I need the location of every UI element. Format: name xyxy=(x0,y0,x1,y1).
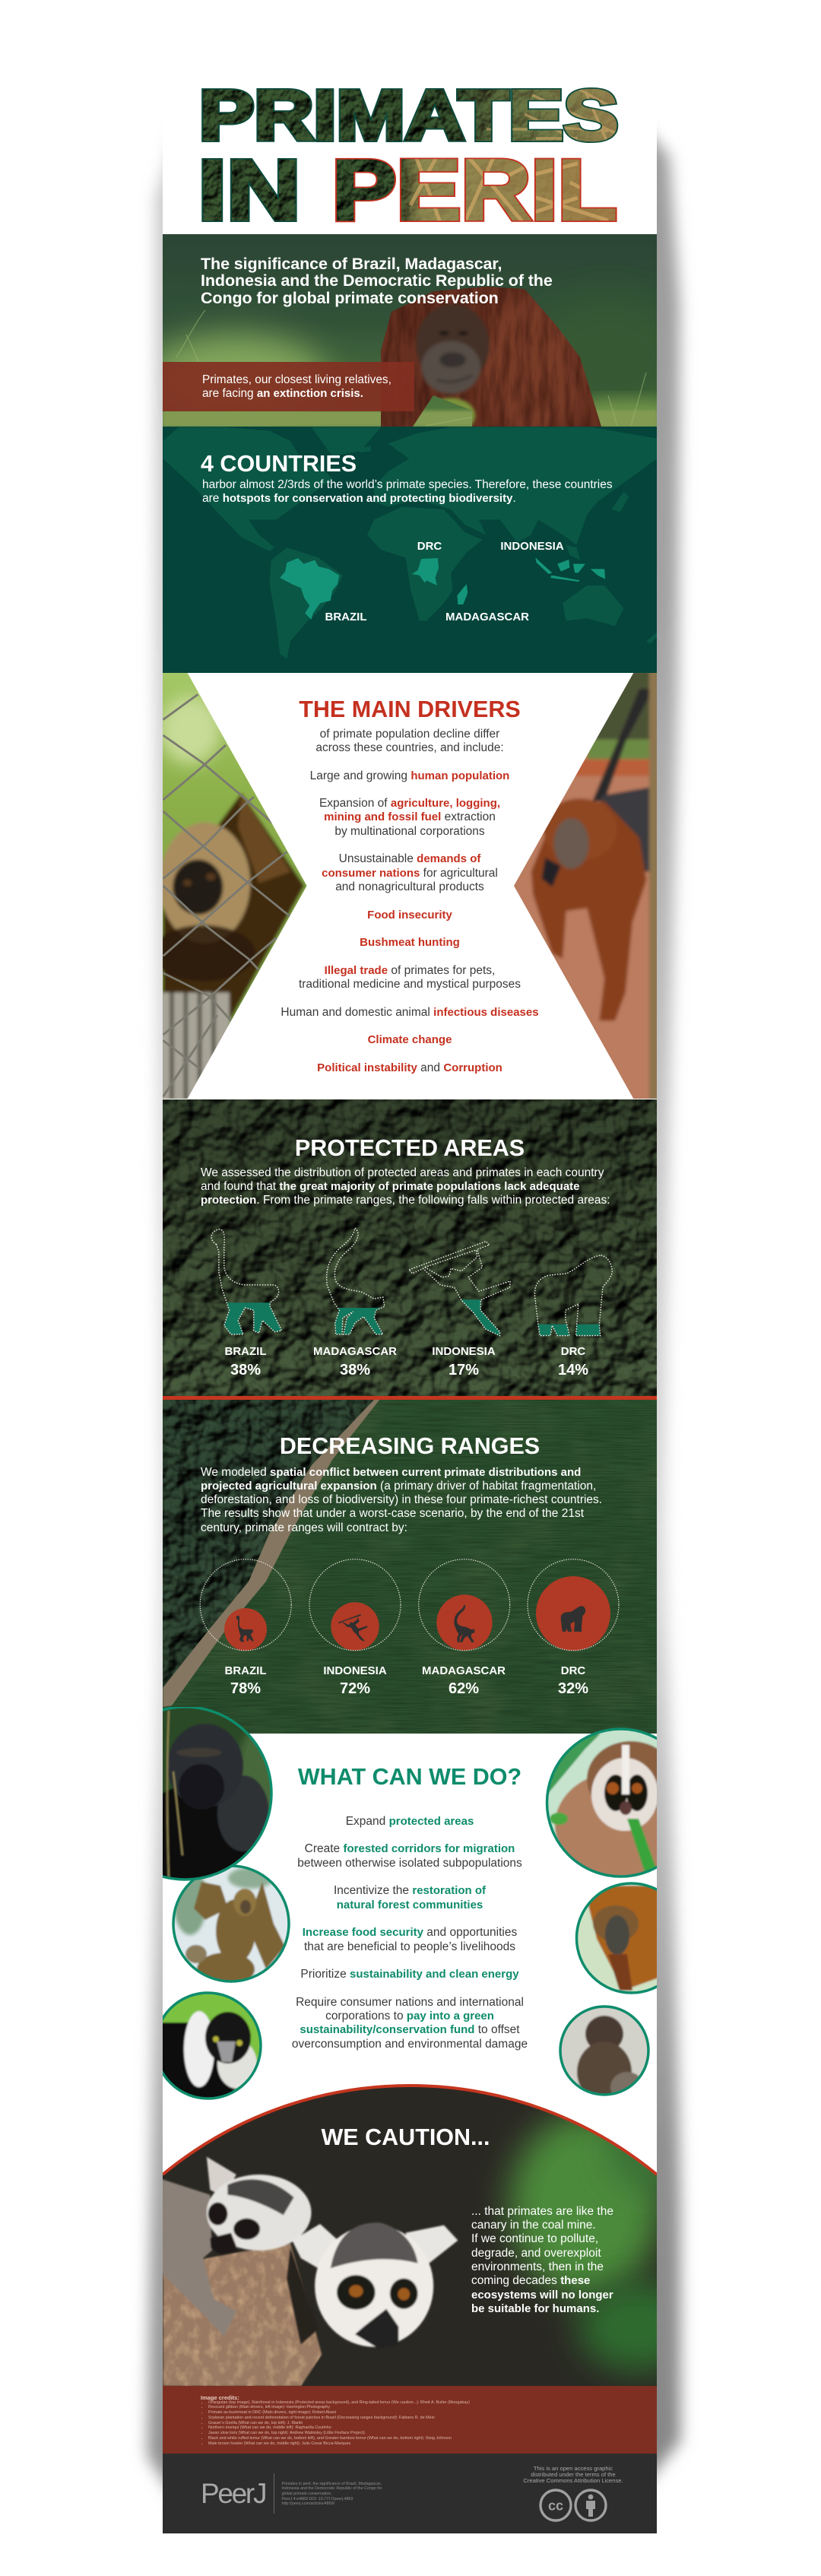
heading: significance: Indonesia and the Democratic Republic of the xyxy=(201,271,553,290)
credits list: Orangutan (top image), Rainforest in Indonesia (Protected areas background), and Ring-tailed lemur (We caution...): Rhett A. Butler (Mongabay) xyxy=(208,2400,470,2405)
stat: Madagascar: MADAGASCAR xyxy=(313,1345,397,1358)
credits list xyxy=(201,2400,470,2446)
heading: 4 countries: 4 COUNTRIES xyxy=(201,451,357,477)
action list: Require consumer nations and international xyxy=(296,1996,524,2009)
stat: Indonesia xyxy=(323,1664,387,1697)
citation: PeerJ 4:e4869 DOI: 10.7717/peerj.4869 xyxy=(281,2497,353,2501)
stat: DRC: 32% xyxy=(558,1680,588,1697)
credits list: Rescued gibbon (Main drivers, left image): Harrington Photography xyxy=(208,2405,330,2409)
intro text: are hotspots for conservation and protecting biodiversity. xyxy=(202,492,516,505)
label: DRC: DRC xyxy=(417,540,442,553)
heading: we caution: WE CAUTION... xyxy=(322,2124,490,2150)
decreasing ranges text: deforestation, and loss of biodiversity) in these four primate-richest countries. xyxy=(201,1493,602,1506)
driver list: Human and domestic animal infectious diseases xyxy=(281,1006,539,1019)
credits list: Northern muriqui (What can we do, middle left): Raphaella Coutinho xyxy=(208,2425,331,2430)
photo: orangutan in grass xyxy=(163,287,657,427)
driver list: mining and fossil fuel extraction xyxy=(324,811,496,823)
caution text: environments, then in the xyxy=(471,2260,604,2273)
heading: significance: The significance of Brazil, Madagascar, xyxy=(201,255,502,273)
credits list: Soybean plantation and recent deforestation of forest patches in Brazil (Decreasing ranges background): Fabiano R. de Melo xyxy=(208,2416,435,2420)
action list: between otherwise isolated subpopulations xyxy=(297,1857,522,1870)
icon: creative commons badges xyxy=(539,2489,607,2522)
caution text: If we continue to pollute, xyxy=(471,2232,598,2245)
panel: 4 countries xyxy=(163,427,657,673)
stat: Brazil: BRAZIL xyxy=(225,1664,266,1677)
credits list: Primate as bushmeat in DRC (Main drivers, right image): Robert Abani xyxy=(208,2410,336,2415)
stat: Brazil: 78% xyxy=(230,1680,261,1697)
driver list: Expansion of agriculture, logging, xyxy=(319,797,500,810)
stat: Madagascar: MADAGASCAR xyxy=(422,1664,506,1677)
stat: Indonesia: 17% xyxy=(449,1362,479,1378)
driver list: Food insecurity xyxy=(367,909,452,922)
credits list: Black and white ruffed lemur (What can we do, bottom left), and Greater bamboo lemur (What can we do, bottom right): Steig Johnson xyxy=(208,2436,452,2441)
credits heading: Image credits: xyxy=(201,2394,239,2401)
callout text xyxy=(202,373,391,400)
panel: footer xyxy=(163,2454,657,2533)
caution text: degrade, and overexploit xyxy=(471,2247,601,2260)
credits list: Grauer’s Gorilla (What can we do, top left): J. Martin xyxy=(208,2421,303,2425)
photo: ring-tailed lemurs xyxy=(160,2083,699,2386)
logo: PeerJ: PeerJ xyxy=(201,2478,265,2509)
heading: what can we do: WHAT CAN WE DO? xyxy=(298,1764,521,1790)
caution text xyxy=(471,2205,613,2315)
callout text: are facing an extinction crisis. xyxy=(202,387,363,400)
caution text: coming decades these xyxy=(471,2274,590,2287)
license text: distributed under the terms of the xyxy=(531,2471,616,2478)
driver list: Climate change xyxy=(368,1033,452,1046)
protected areas text: protection. From the primate ranges, the following falls within protected areas: xyxy=(201,1194,610,1207)
license text xyxy=(523,2465,623,2484)
stat: DRC: 14% xyxy=(558,1362,588,1378)
panel: we caution xyxy=(163,2084,657,2386)
photo: howler monkey xyxy=(575,1882,657,1994)
chart: range contraction circles xyxy=(200,1559,619,1651)
citation: global primate conservation. xyxy=(281,2492,332,2496)
decreasing ranges text: We modeled spatial conflict between current primate distributions and xyxy=(201,1466,581,1478)
icon: gorilla xyxy=(561,1606,585,1632)
action list: natural forest communities xyxy=(337,1899,483,1911)
stat: Madagascar: 62% xyxy=(449,1680,479,1697)
callout text: Primates, our closest living relatives, xyxy=(202,373,391,386)
action list: Create forested corridors for migration xyxy=(305,1842,515,1855)
decreasing ranges text xyxy=(201,1466,602,1534)
stat: Madagascar: 38% xyxy=(340,1362,370,1378)
background: rainforest canopy xyxy=(163,1099,657,1396)
title: PRIMATES xyxy=(201,87,619,143)
icon: gibbon xyxy=(338,1614,367,1642)
panel: title xyxy=(163,87,657,234)
citation: Indonesia and the Democratic Republic of the Congo for xyxy=(281,2486,382,2491)
panel: what can we do xyxy=(163,1707,657,2173)
caution text: ecosystems will no longer xyxy=(471,2289,613,2302)
heading: significance: Congo for global primate conservation xyxy=(201,289,499,307)
action list xyxy=(292,1815,528,2051)
credits list: Male brown howler (What can we do, middle right): Julio Cesar Bicca-Marques xyxy=(208,2441,350,2446)
label: Madagascar: MADAGASCAR xyxy=(445,611,529,623)
license text: This is an open access graphic xyxy=(534,2465,613,2472)
stat: Brazil xyxy=(225,1345,266,1378)
panel: decreasing ranges xyxy=(163,1400,657,1734)
heading: significance xyxy=(201,255,553,307)
stat: Indonesia xyxy=(432,1345,496,1378)
icon: lemur xyxy=(454,1604,475,1642)
citation: http://peerj.com/articles/4869/ xyxy=(281,2501,334,2506)
protected areas text: We assessed the distribution of protected areas and primates in each country xyxy=(201,1166,604,1179)
panel: main drivers xyxy=(163,673,657,1099)
action list: Incentivize the restoration of xyxy=(334,1884,486,1897)
driver list: of primate population decline differ xyxy=(320,728,499,741)
stat: Madagascar xyxy=(422,1664,506,1697)
action list: Expand protected areas xyxy=(346,1815,474,1828)
stat: Brazil: BRAZIL xyxy=(225,1345,266,1358)
action list: corporations to pay into a green xyxy=(325,2010,494,2022)
stat: DRC: DRC xyxy=(561,1664,585,1677)
red callout box xyxy=(163,362,414,411)
action list: Prioritize sustainability and clean energy xyxy=(300,1968,519,1981)
country: Indonesia xyxy=(535,557,605,582)
driver list: across these countries, and include: xyxy=(315,741,504,754)
driver list: and nonagricultural products xyxy=(335,880,484,893)
citation: Primates in peril: the significance of Brazil, Madagascar, xyxy=(281,2482,382,2486)
icon: monkey xyxy=(236,1616,254,1642)
stat: Brazil: 38% xyxy=(230,1362,261,1378)
photo: slow loris xyxy=(546,1727,657,1878)
panel: protected areas xyxy=(163,1099,657,1400)
panel: hero orangutan intro xyxy=(163,234,657,427)
driver list: Unsustainable demands of xyxy=(339,852,480,865)
citation xyxy=(281,2482,382,2506)
protected areas text xyxy=(201,1166,610,1207)
action list: overconsumption and environmental damage xyxy=(292,2038,528,2051)
panel: image credits xyxy=(163,2386,657,2454)
intro text xyxy=(202,478,613,505)
photo: bamboo lemur xyxy=(559,2005,650,2096)
stat: DRC xyxy=(558,1664,588,1697)
license text: Creative Commons Attribution License. xyxy=(523,2477,623,2484)
stat: Brazil xyxy=(225,1664,266,1697)
action list: that are beneficial to people’s livelihoods xyxy=(304,1940,515,1953)
photo: ruffed lemur xyxy=(163,1991,262,2100)
caution text: canary in the coal mine. xyxy=(471,2219,596,2232)
stat: DRC xyxy=(558,1345,588,1378)
label: Brazil: BRAZIL xyxy=(325,611,366,623)
driver list: Bushmeat hunting xyxy=(360,936,460,949)
photo: monkey on leash xyxy=(514,673,657,1099)
country: DRC xyxy=(412,558,439,585)
photo: muriqui xyxy=(172,1864,290,1983)
stat: Indonesia: 72% xyxy=(340,1680,370,1697)
world map xyxy=(163,427,657,658)
red divider xyxy=(163,1396,657,1400)
driver list: Large and growing human population xyxy=(310,769,509,782)
intro text: harbor almost 2/3rds of the world’s primate species. Therefore, these countries xyxy=(202,478,613,491)
action list: Increase food security and opportunities xyxy=(303,1926,517,1939)
icons: primate range silhouettes xyxy=(211,1228,612,1336)
title: PRIMATES: PRIMATES xyxy=(199,76,619,155)
caution text: ... that primates are like the xyxy=(471,2205,613,2218)
driver list xyxy=(281,728,539,1074)
photo: gibbon behind fence xyxy=(163,673,307,1099)
decreasing ranges text: The results show that under a worst-case scenario, by the end of the 21st xyxy=(201,1507,584,1520)
heading: protected areas: PROTECTED AREAS xyxy=(295,1135,525,1161)
driver list: traditional medicine and mystical purposes xyxy=(299,978,521,991)
action list: sustainability/conservation fund to offset xyxy=(300,2023,520,2036)
red arch border xyxy=(163,2086,657,2175)
decreasing ranges text: century, primate ranges will contract by: xyxy=(201,1521,407,1534)
protected areas text: and found that the great majority of primate populations lack adequate xyxy=(201,1180,580,1193)
country: Madagascar xyxy=(457,584,468,604)
driver list: Political instability and Corruption xyxy=(317,1061,502,1074)
country: Brazil xyxy=(280,558,339,620)
heading: decreasing ranges: DECREASING RANGES xyxy=(280,1433,540,1459)
background: soybean field and forest edge xyxy=(163,1399,657,1734)
decreasing ranges text: projected agricultural expansion (a primary driver of habitat fragmentation, xyxy=(201,1480,596,1493)
credits list: Javan slow loris (What can we do, top right): Andrew Walmsley (Little Fireface Project). xyxy=(208,2431,366,2435)
driver list: Illegal trade of primates for pets, xyxy=(325,964,495,977)
stat: Madagascar xyxy=(313,1345,397,1378)
stat: DRC: DRC xyxy=(561,1345,585,1358)
photo: gorilla xyxy=(163,1707,273,1881)
heading: main drivers: THE MAIN DRIVERS xyxy=(299,696,521,722)
driver list: by multinational corporations xyxy=(334,825,485,838)
caution text: be suitable for humans. xyxy=(471,2302,599,2315)
driver list: consumer nations for agricultural xyxy=(322,867,498,880)
icon: creative commons badges: cc xyxy=(548,2498,563,2514)
stat: Indonesia: INDONESIA xyxy=(432,1345,496,1358)
label: Indonesia: INDONESIA xyxy=(500,540,564,553)
title: IN PERIL xyxy=(201,158,617,222)
stat: Indonesia: INDONESIA xyxy=(323,1664,387,1677)
